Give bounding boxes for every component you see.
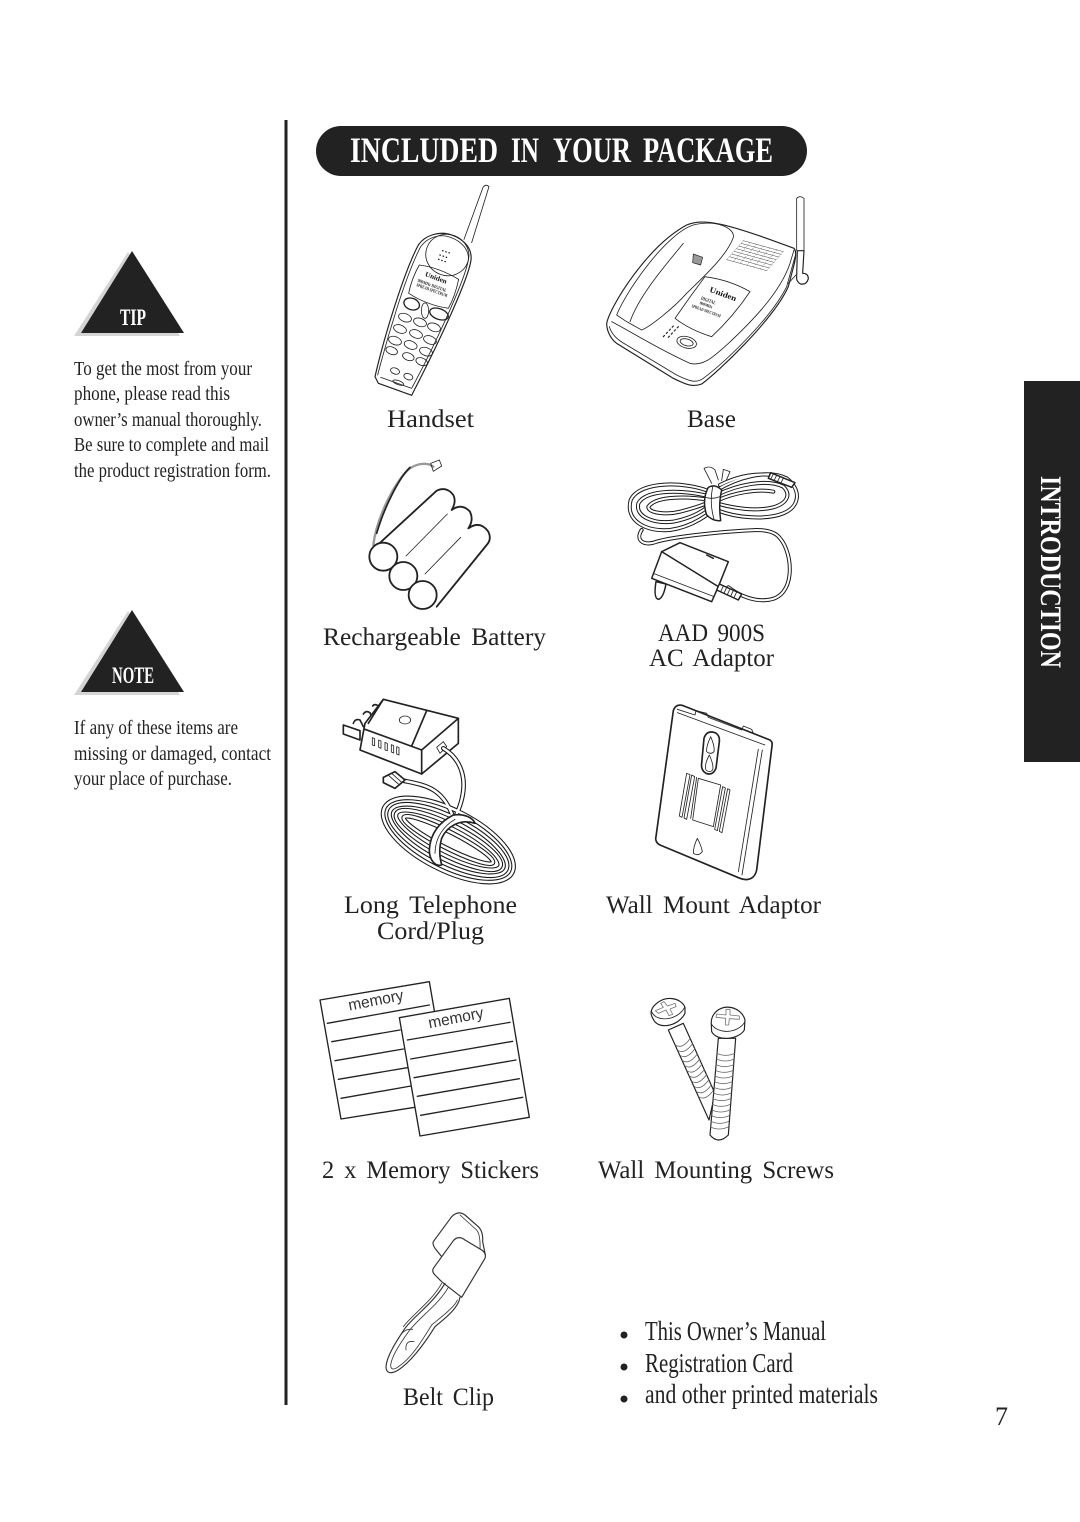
note text [74, 717, 271, 790]
caption: rechargeable battery: Rechargeable Battery [323, 624, 547, 651]
tip text [74, 358, 271, 482]
caption: AC adaptor [649, 620, 775, 672]
bullet list: printed materials: This Owner’s Manual [645, 1316, 826, 1346]
caption: wall mounting screws: Wall Mounting Screws [598, 1157, 834, 1184]
tip text: the product registration form. [74, 460, 271, 482]
caption: wall mount adaptor: Wall Mount Adaptor [606, 892, 822, 919]
caption: belt clip: Belt Clip [403, 1384, 494, 1411]
bullet list: printed materials: and other printed materials [645, 1379, 878, 1409]
title banner [316, 126, 807, 176]
icon: rechargeable battery [369, 460, 490, 609]
note text: If any of these items are [74, 717, 238, 739]
section tab: introduction: INTRODUCTION [1034, 476, 1067, 668]
vertical divider rule [284, 120, 288, 1405]
title banner: PACKAGE [643, 130, 773, 170]
icon: AC adaptor [630, 467, 797, 602]
title banner: IN [511, 130, 539, 170]
icon: handset: SPREAD SPECTRUM [415, 283, 448, 299]
icon: base unit [607, 197, 808, 386]
icon: wall mounting screws [651, 998, 745, 1140]
icon: base unit: SPREAD SPECTRUM [691, 303, 722, 318]
bullet list: printed materials: Registration Card [645, 1348, 793, 1378]
tip text: owner’s manual thoroughly. [74, 409, 262, 431]
icon: memory stickers [320, 982, 529, 1136]
note panel [74, 610, 271, 790]
icon: handset: 900MHz DIGITAL [417, 279, 447, 294]
title banner: YOUR [553, 130, 632, 170]
note text: missing or damaged, contact [74, 743, 271, 765]
caption: base: Base [687, 406, 736, 433]
bullet list: printed materials [620, 1316, 878, 1409]
title banner: INCLUDED [350, 130, 498, 170]
icon: tip triangle: TIP [120, 305, 146, 330]
tip text: phone, please read this [74, 383, 230, 405]
icon: note triangle [74, 610, 184, 695]
tip text: Be sure to complete and mail [74, 434, 269, 456]
icon: tip triangle [74, 251, 184, 336]
icon: handset [375, 185, 489, 395]
caption: long telephone cord: Cord/Plug [377, 918, 485, 945]
icon: handset: Uniden [424, 270, 448, 286]
tip text: To get the most from your [74, 358, 252, 380]
caption: AC adaptor: AAD 900S [658, 620, 765, 647]
icon: memory stickers: memory [427, 1005, 485, 1032]
icon: base unit: 900MHz [699, 300, 713, 310]
icon: note triangle: NOTE [112, 663, 154, 688]
icon: belt clip [386, 1213, 485, 1373]
icon: memory stickers: memory [347, 987, 405, 1015]
caption: long telephone cord [344, 892, 517, 945]
note text: your place of purchase. [74, 768, 232, 790]
caption: long telephone cord: Long Telephone [344, 892, 517, 919]
icon: long telephone cord and plug [343, 699, 526, 899]
tip panel [74, 251, 271, 482]
icon: base unit: DIGITAL [700, 297, 717, 307]
section tab: introduction [1024, 381, 1080, 762]
caption: handset: Handset [387, 406, 474, 433]
icon: wall mount adaptor [656, 705, 772, 880]
caption: memory stickers: 2 x Memory Stickers [322, 1157, 539, 1184]
caption: AC adaptor: AC Adaptor [649, 645, 775, 672]
icon: base unit: Uniden [708, 285, 738, 303]
page number: 7 [995, 1402, 1008, 1431]
